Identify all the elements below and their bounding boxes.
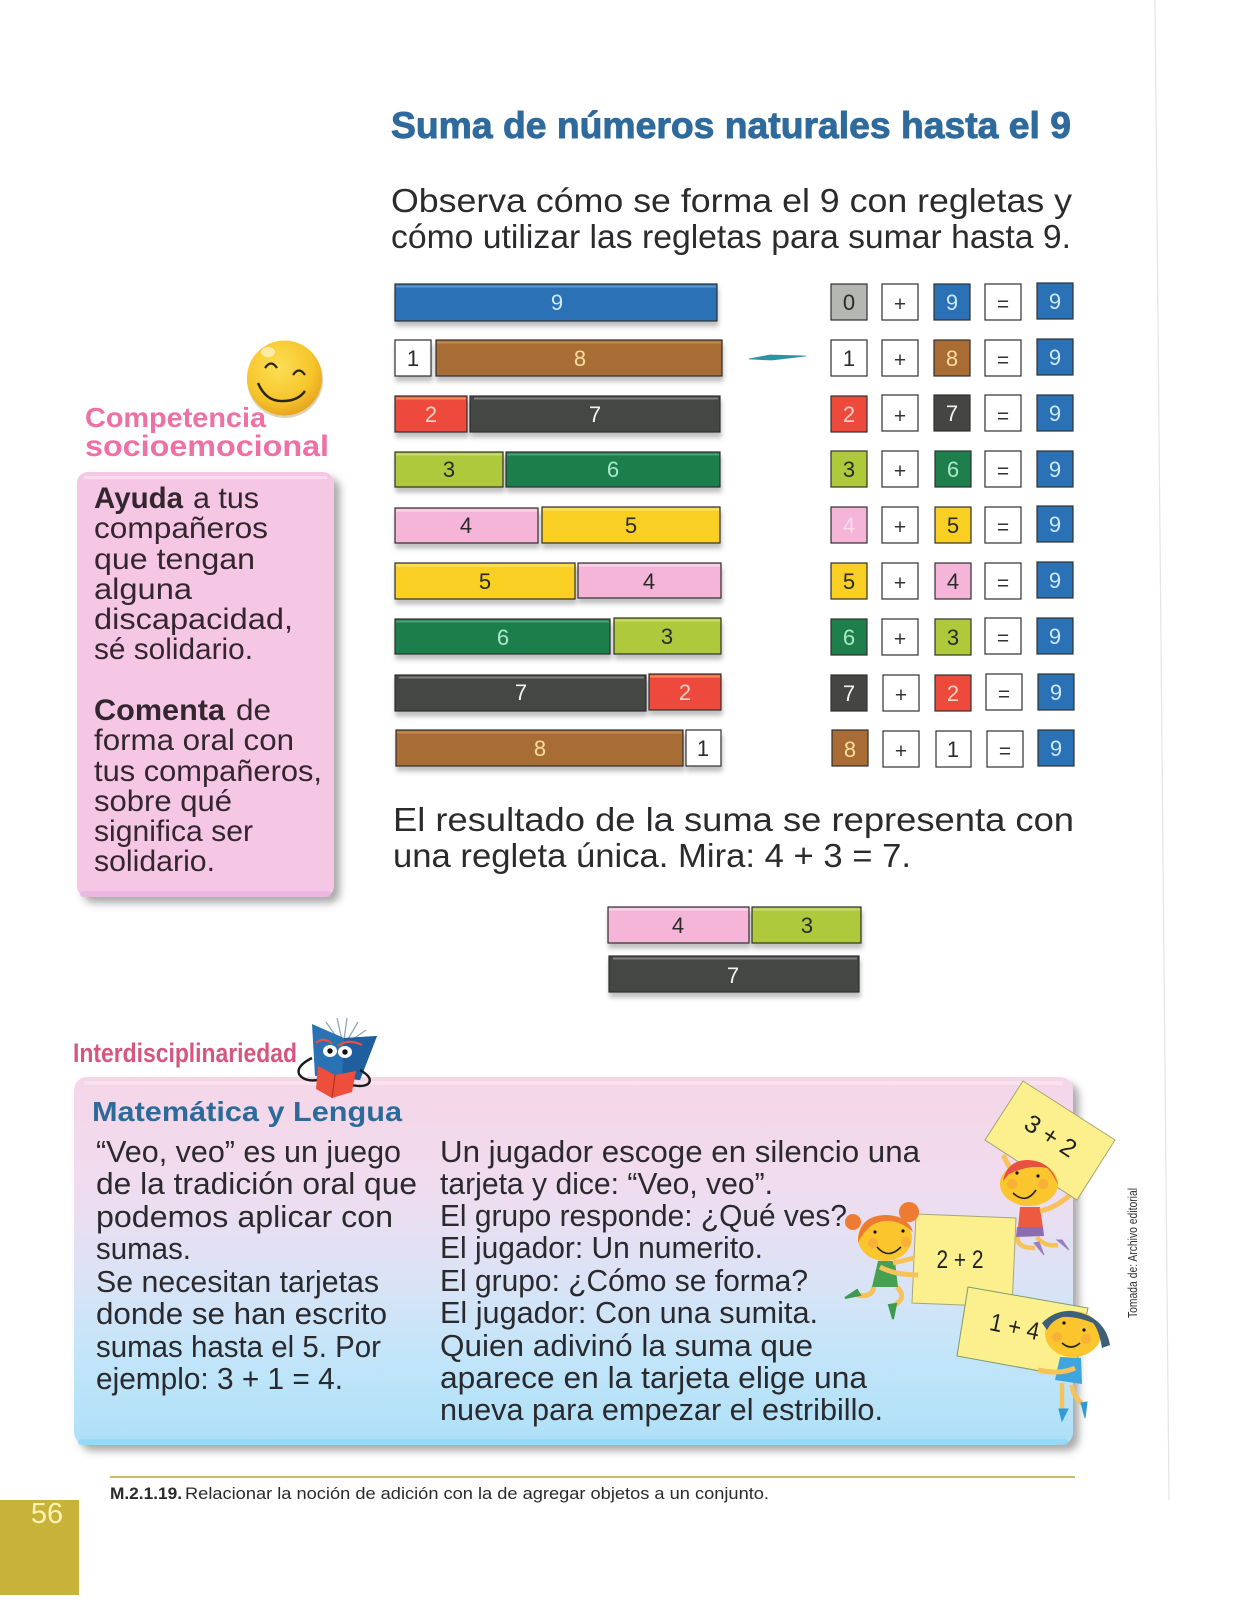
equation 3+6=9: 6 [947,457,959,482]
text: Comenta [94,694,322,878]
equation 5+4=9: 9 [1049,568,1061,593]
explanation text [393,801,1074,874]
text: right column: aparece en la tarjeta elige una [440,1360,868,1395]
rod row 4+5: 4 [460,513,472,538]
text: left column: Se necesitan tarjetas [96,1264,379,1299]
equation 6+3=9 [831,618,1073,655]
text: right column [440,1134,921,1427]
card 1+4 with child: 1 + 4 [987,1308,1042,1346]
equation 6+3=9: = [997,627,1009,650]
equation 8+1=9: 9 [1050,736,1062,761]
equation 3+6=9: 3 [843,457,855,482]
text: right column: tarjeta y dice: “Veo, veo”. [440,1166,773,1201]
equation 0+9=9: + [894,293,906,316]
equation 7+2=9: + [895,684,907,707]
equation 6+3=9: 9 [1049,624,1061,649]
equation 4+5=9: + [894,516,906,539]
rod row 4+5 [395,507,720,543]
card 3+2 with boy: 3 + 2 [1019,1109,1082,1163]
footer rule [110,1476,1075,1478]
equation 2+7=9 [831,395,1073,432]
rod row 7+2: 7 [515,680,527,705]
equation 4+5=9: 4 [843,513,855,538]
explanation text: El resultado de la suma se representa con [393,801,1074,838]
equation 4+5=9: 5 [947,513,959,538]
card 3+2 with boy [985,1081,1115,1255]
rod row 9: 9 [551,290,563,315]
equation 2+7=9: 7 [946,401,958,426]
page number tab: 56 [31,1498,63,1530]
rod row 6+3: 6 [497,625,509,650]
text: Ayuda: Ayuda [94,482,183,515]
text: right column: nueva para empezar el estribillo. [440,1392,883,1427]
rod row 1+8 [395,340,722,376]
text: right column: El jugador: Con una sumita. [440,1295,818,1330]
text: Comenta: solidario. [94,845,215,878]
equation 3+6=9 [831,451,1073,487]
rod row 8+1: 1 [697,736,709,761]
text: left column: podemos aplicar con [96,1199,393,1234]
equation 2+7=9: 9 [1049,401,1061,426]
explanation text: una regleta única. Mira: 4 + 3 = 7. [393,837,911,874]
equation 0+9=9: = [997,293,1009,316]
text: Comenta: forma oral con [94,724,294,757]
rod row 1+8: 8 [574,346,586,371]
equation 4+5=9: = [997,516,1009,539]
rod row 8+1: 8 [534,736,546,761]
source credit: Tomada de: Archivo editorial [1126,1188,1140,1318]
text: right column: El jugador: Un numerito. [440,1230,763,1265]
text: left column: “Veo, veo” es un juego [96,1134,401,1169]
rod row 7+2: 2 [679,680,691,705]
rod row 2+7: 7 [589,402,601,427]
example rods 4+3=7 [608,907,861,992]
equation 0+9=9: 0 [843,290,855,315]
equation 3+6=9: + [894,460,906,483]
pen mark [749,355,806,360]
intro text [391,182,1073,255]
text: Ayuda: discapacidad, [94,603,293,636]
example rods 4+3=7: 4 [672,913,684,938]
text: Comenta: Comenta [94,694,225,727]
equation 7+2=9: 9 [1050,680,1062,705]
text: Ayuda: a tus [193,482,259,515]
text: Ayuda [94,482,293,666]
text: left column [96,1134,417,1396]
card 2+2 with girl [845,1202,1016,1319]
rod row 5+4: 4 [643,569,655,594]
heading: Interdisciplinariedad: Interdisciplinariedad [73,1038,297,1068]
rod row 5+4 [395,563,721,599]
rod row 2+7 [395,396,720,432]
example rods 4+3=7: 7 [727,963,739,988]
illustration: children with cards [845,1081,1115,1421]
text: Ayuda: compañeros [94,512,268,545]
equation 6+3=9: 6 [843,625,855,650]
equations grid [831,283,1074,767]
intro text: cómo utilizar las regletas para sumar hasta 9. [391,218,1071,255]
rod row 2+7: 2 [425,402,437,427]
text: left column: ejemplo: 3 + 1 = 4. [96,1361,343,1396]
text: right column: El grupo: ¿Cómo se forma? [440,1263,808,1298]
text: right column: Un jugador escoge en silencio una [440,1134,921,1169]
heading: competencia socioemocional [85,402,329,463]
title: Suma de números naturales hasta el 9 [391,105,1071,146]
equation 5+4=9: = [997,572,1009,595]
rod row 3+6: 6 [607,457,619,482]
text: left column: sumas. [96,1231,191,1266]
equation 2+7=9: 2 [843,402,855,427]
text: Comenta: tus compañeros, [94,755,322,788]
text: Ayuda: que tengan [94,543,255,576]
equation 8+1=9 [832,730,1074,767]
equation 5+4=9: 5 [843,569,855,594]
rod row 1+8: 1 [407,346,419,371]
equation 1+8=9: 1 [843,346,855,371]
card 1+4 with child [957,1287,1110,1421]
equation 1+8=9: 8 [946,346,958,371]
equation 8+1=9: = [999,740,1011,763]
equation 4+5=9: 9 [1049,512,1061,537]
text: right column: El grupo responde: ¿Qué ves? [440,1198,847,1233]
footer: skill text: Relacionar la noción de adición con la de agregar objetos a un conjunto. [185,1484,769,1503]
equation 6+3=9: 3 [947,625,959,650]
equation 7+2=9: = [998,683,1010,706]
intro text: Observa cómo se forma el 9 con regletas y [391,182,1073,219]
footer: skill text: M.2.1.19. [110,1484,182,1503]
text: left column: de la tradición oral que [96,1166,417,1201]
page edge line [1155,0,1169,1500]
panel: interdisciplinariedad [74,1077,1073,1445]
equation 1+8=9: = [997,349,1009,372]
equation 1+8=9 [831,339,1073,376]
text: Comenta: sobre qué [94,785,232,818]
equation 3+6=9: 9 [1049,457,1061,482]
equation 5+4=9: + [894,572,906,595]
equation 1+8=9: + [894,349,906,372]
text: right column: Quien adivinó la suma que [440,1328,813,1363]
equation 8+1=9: 1 [947,737,959,762]
equation 7+2=9 [831,674,1074,711]
equation 6+3=9: + [894,628,906,651]
equation 1+8=9: 9 [1049,345,1061,370]
equation 8+1=9: + [895,740,907,763]
equation 2+7=9: + [894,405,906,428]
equation 2+7=9: = [997,405,1009,428]
rod row 4+5: 5 [625,513,637,538]
rod row 5+4: 5 [479,569,491,594]
icon: smiley [247,340,323,418]
rods chart: compositions of 9 [395,284,722,766]
text: left column: donde se han escrito [96,1296,387,1331]
rod row 9 [395,284,717,321]
text: Comenta: de [236,694,271,727]
heading: competencia socioemocional: socioemocional [85,430,329,463]
panel: socioemocional [77,472,334,897]
equation 0+9=9: 9 [946,290,958,315]
equation 5+4=9: 4 [947,569,959,594]
heading: Matemática y Lengua: Matemática y Lengua [92,1096,402,1127]
rod row 3+6: 3 [443,457,455,482]
rod row 6+3 [395,618,721,654]
text: Ayuda: alguna [94,573,192,606]
equation 3+6=9: = [997,460,1009,483]
equation 0+9=9: 9 [1049,289,1061,314]
equation 7+2=9: 2 [947,681,959,706]
page number tab [0,1498,79,1595]
equation 8+1=9: 8 [844,737,856,762]
text: Comenta: significa ser [94,815,253,848]
equation 4+5=9 [831,506,1073,543]
rod row 3+6 [395,452,720,487]
icon: book mascot [299,1018,377,1098]
rod row 7+2 [395,674,721,711]
text: left column: sumas hasta el 5. Por [96,1329,381,1364]
equation 0+9=9 [831,283,1073,320]
text: Ayuda: sé solidario. [94,633,253,666]
rod row 8+1 [396,730,721,766]
example rods 4+3=7: 3 [801,913,813,938]
card 2+2 with girl: 2 + 2 [936,1246,984,1274]
equation 7+2=9: 7 [843,681,855,706]
heading: competencia socioemocional: Competencia [85,402,266,433]
rod row 6+3: 3 [661,624,673,649]
equation 5+4=9 [831,562,1073,599]
